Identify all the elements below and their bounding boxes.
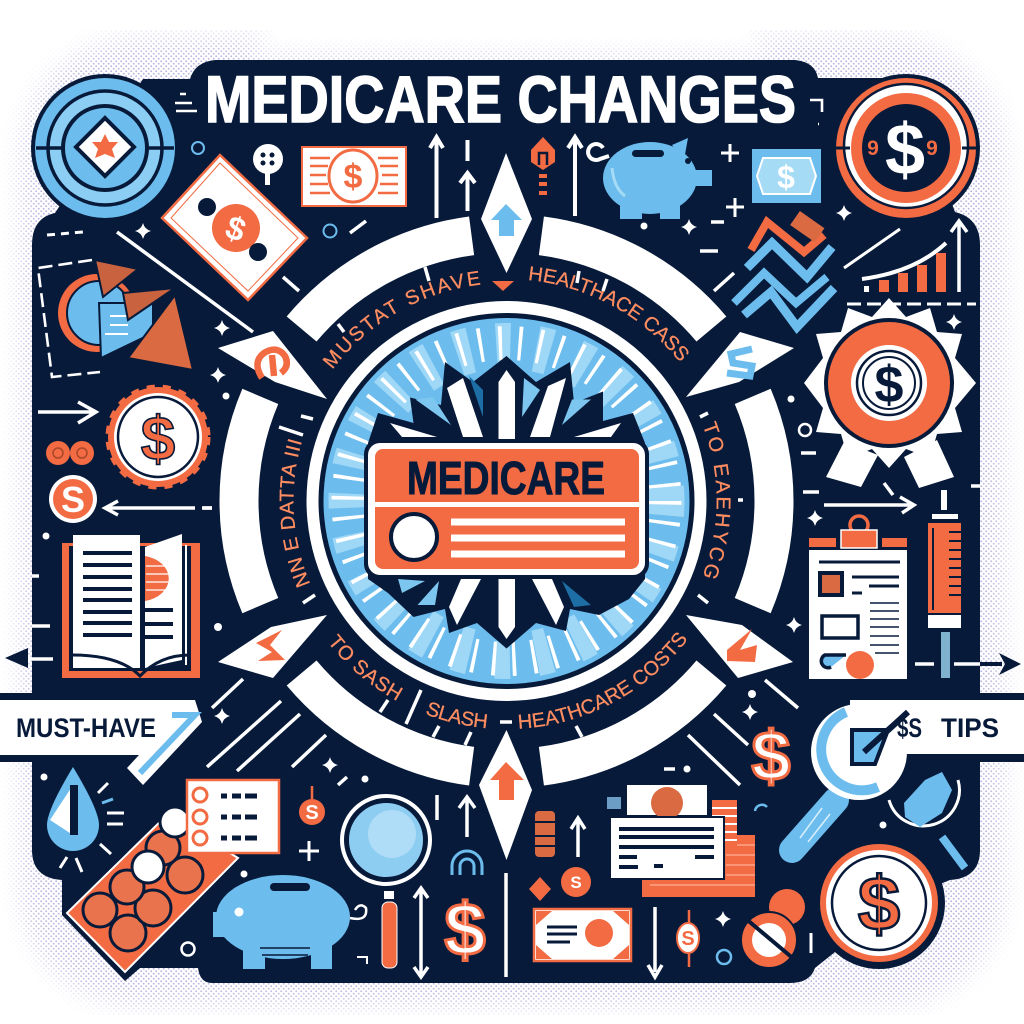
curved slogan text: MUSTAT SHAVE — [322, 270, 480, 369]
icon: lollipop marker — [253, 144, 283, 185]
north-west kite — [218, 331, 327, 399]
icon: blue medallion — [35, 78, 175, 218]
icon: bottom bank note — [534, 909, 631, 961]
icon: orange bank note: $ — [344, 158, 363, 196]
icon: coin stack — [535, 811, 555, 857]
icon: tilted bank note — [162, 155, 307, 300]
icon: dollar coin left: S — [61, 479, 85, 520]
south-east kite — [686, 615, 793, 678]
small tick — [810, 933, 812, 953]
vertical arrows and arch — [414, 795, 506, 977]
Medicare card — [364, 439, 649, 579]
icon: house marker — [531, 137, 555, 195]
arrows under title — [430, 137, 609, 218]
tips banner: $S — [897, 713, 922, 743]
icon: orange bank note — [302, 147, 406, 206]
arrow right to coin badge — [38, 402, 96, 423]
icon: blue seven arrow — [140, 715, 195, 773]
icon: pie and document cluster — [38, 260, 193, 377]
icon: small swirl coin: S — [570, 873, 582, 892]
banner label: MUST-HAVE — [16, 713, 156, 743]
ring tick marks — [117, 221, 980, 785]
icon: syringe — [928, 490, 961, 678]
card heading: MEDICARE — [407, 452, 605, 504]
curved slogan text: HEATHCARE COSTS — [518, 632, 686, 729]
icon: orange rosette badge: $ — [875, 356, 904, 414]
icon: coin strip — [67, 807, 238, 972]
icon: zigzag trend chevrons — [734, 211, 834, 327]
title accent marks — [175, 94, 822, 124]
icon: orange pendant coin — [299, 786, 325, 825]
plus mark — [299, 841, 319, 861]
icon: orange dollar coin: 9 — [867, 137, 879, 160]
card photo — [391, 514, 437, 560]
icon: scalloped dollar badge — [108, 387, 208, 487]
card lines — [451, 522, 625, 554]
icon: blue piggy bank bottom — [213, 875, 367, 969]
icon: blue bank note: $ — [777, 159, 795, 195]
outer ring segments — [239, 236, 774, 766]
plus marks — [721, 144, 744, 217]
icon: water drop with rays — [47, 767, 124, 872]
icon: documents stack — [607, 785, 755, 897]
icon: checklist — [187, 780, 279, 853]
small orange triangle in slogan — [492, 281, 514, 291]
bar chart with rising arrow — [844, 221, 976, 304]
big dollar sign right: $ — [752, 717, 790, 795]
dots and rings — [40, 142, 886, 964]
arrow down — [648, 907, 662, 977]
dashes above pie cluster — [47, 232, 83, 235]
icon: small swirl coin — [561, 867, 591, 897]
curved slogan text: NN E DATTA III — [280, 439, 310, 588]
arrow right bottom of syringe — [915, 653, 1021, 675]
icon: blue piggy bank top — [603, 138, 712, 219]
icon: orange dollar coin: 9 — [926, 137, 938, 160]
arrow up beside stack — [571, 818, 585, 857]
icon: orange rosette badge — [804, 298, 976, 488]
curved slogan text — [280, 266, 731, 729]
icon: large dollar coin: $ — [858, 862, 900, 947]
south-west kite — [218, 615, 327, 678]
icon: clipboard — [809, 516, 907, 679]
bottom kite with orange arrow — [479, 730, 532, 860]
icon: second magnifier — [889, 772, 965, 868]
icon: orange diamond — [529, 877, 551, 901]
north-east kite — [686, 332, 794, 397]
icon: magnifying glass — [342, 796, 430, 968]
tips banner — [811, 700, 1024, 800]
curved slogan text: SLASH — [426, 702, 488, 728]
starburst behind card — [368, 356, 645, 648]
icon: orange dollar coin: $ — [885, 110, 925, 190]
icon: scalloped dollar badge: $ — [141, 405, 175, 474]
magnifier handle behind tips banner — [792, 800, 836, 850]
icon: checkmark arrow — [852, 730, 888, 764]
arrow left from coin badge — [105, 501, 212, 515]
curved slogan text: HEALTHACE CASS — [529, 266, 689, 360]
icon: dollar coin left — [49, 475, 97, 523]
top kite with blue arrow — [481, 153, 532, 273]
title: MEDICARE CHANGES — [205, 62, 796, 136]
must-have banner — [0, 700, 202, 785]
curved slogan text: TO SASH — [330, 633, 403, 700]
icon: orange pendant coin: S — [305, 802, 319, 824]
banner label: TIPS — [941, 713, 999, 743]
curved slogan text: TO EAEHYCG — [704, 420, 731, 578]
arrow right above clipboard — [824, 497, 914, 513]
icon: blue bank note — [752, 149, 821, 203]
icon: orange dollar coin — [836, 78, 976, 218]
small blue arc — [755, 805, 767, 811]
icon: large dollar coin — [820, 844, 938, 962]
icon: tilted bank note: $ — [221, 208, 251, 249]
sparkle stars — [135, 205, 962, 927]
icon: hanging dollar tag — [677, 910, 699, 967]
big dollar sign centre bottom: $ — [444, 888, 486, 971]
icon: hanging dollar tag: S — [681, 928, 695, 950]
icon: small coin pair — [46, 441, 94, 465]
icon: crossed-out coins — [741, 889, 805, 968]
arrow left at page edge — [5, 576, 53, 668]
icon: open book — [62, 534, 200, 678]
central medallion — [306, 301, 706, 701]
